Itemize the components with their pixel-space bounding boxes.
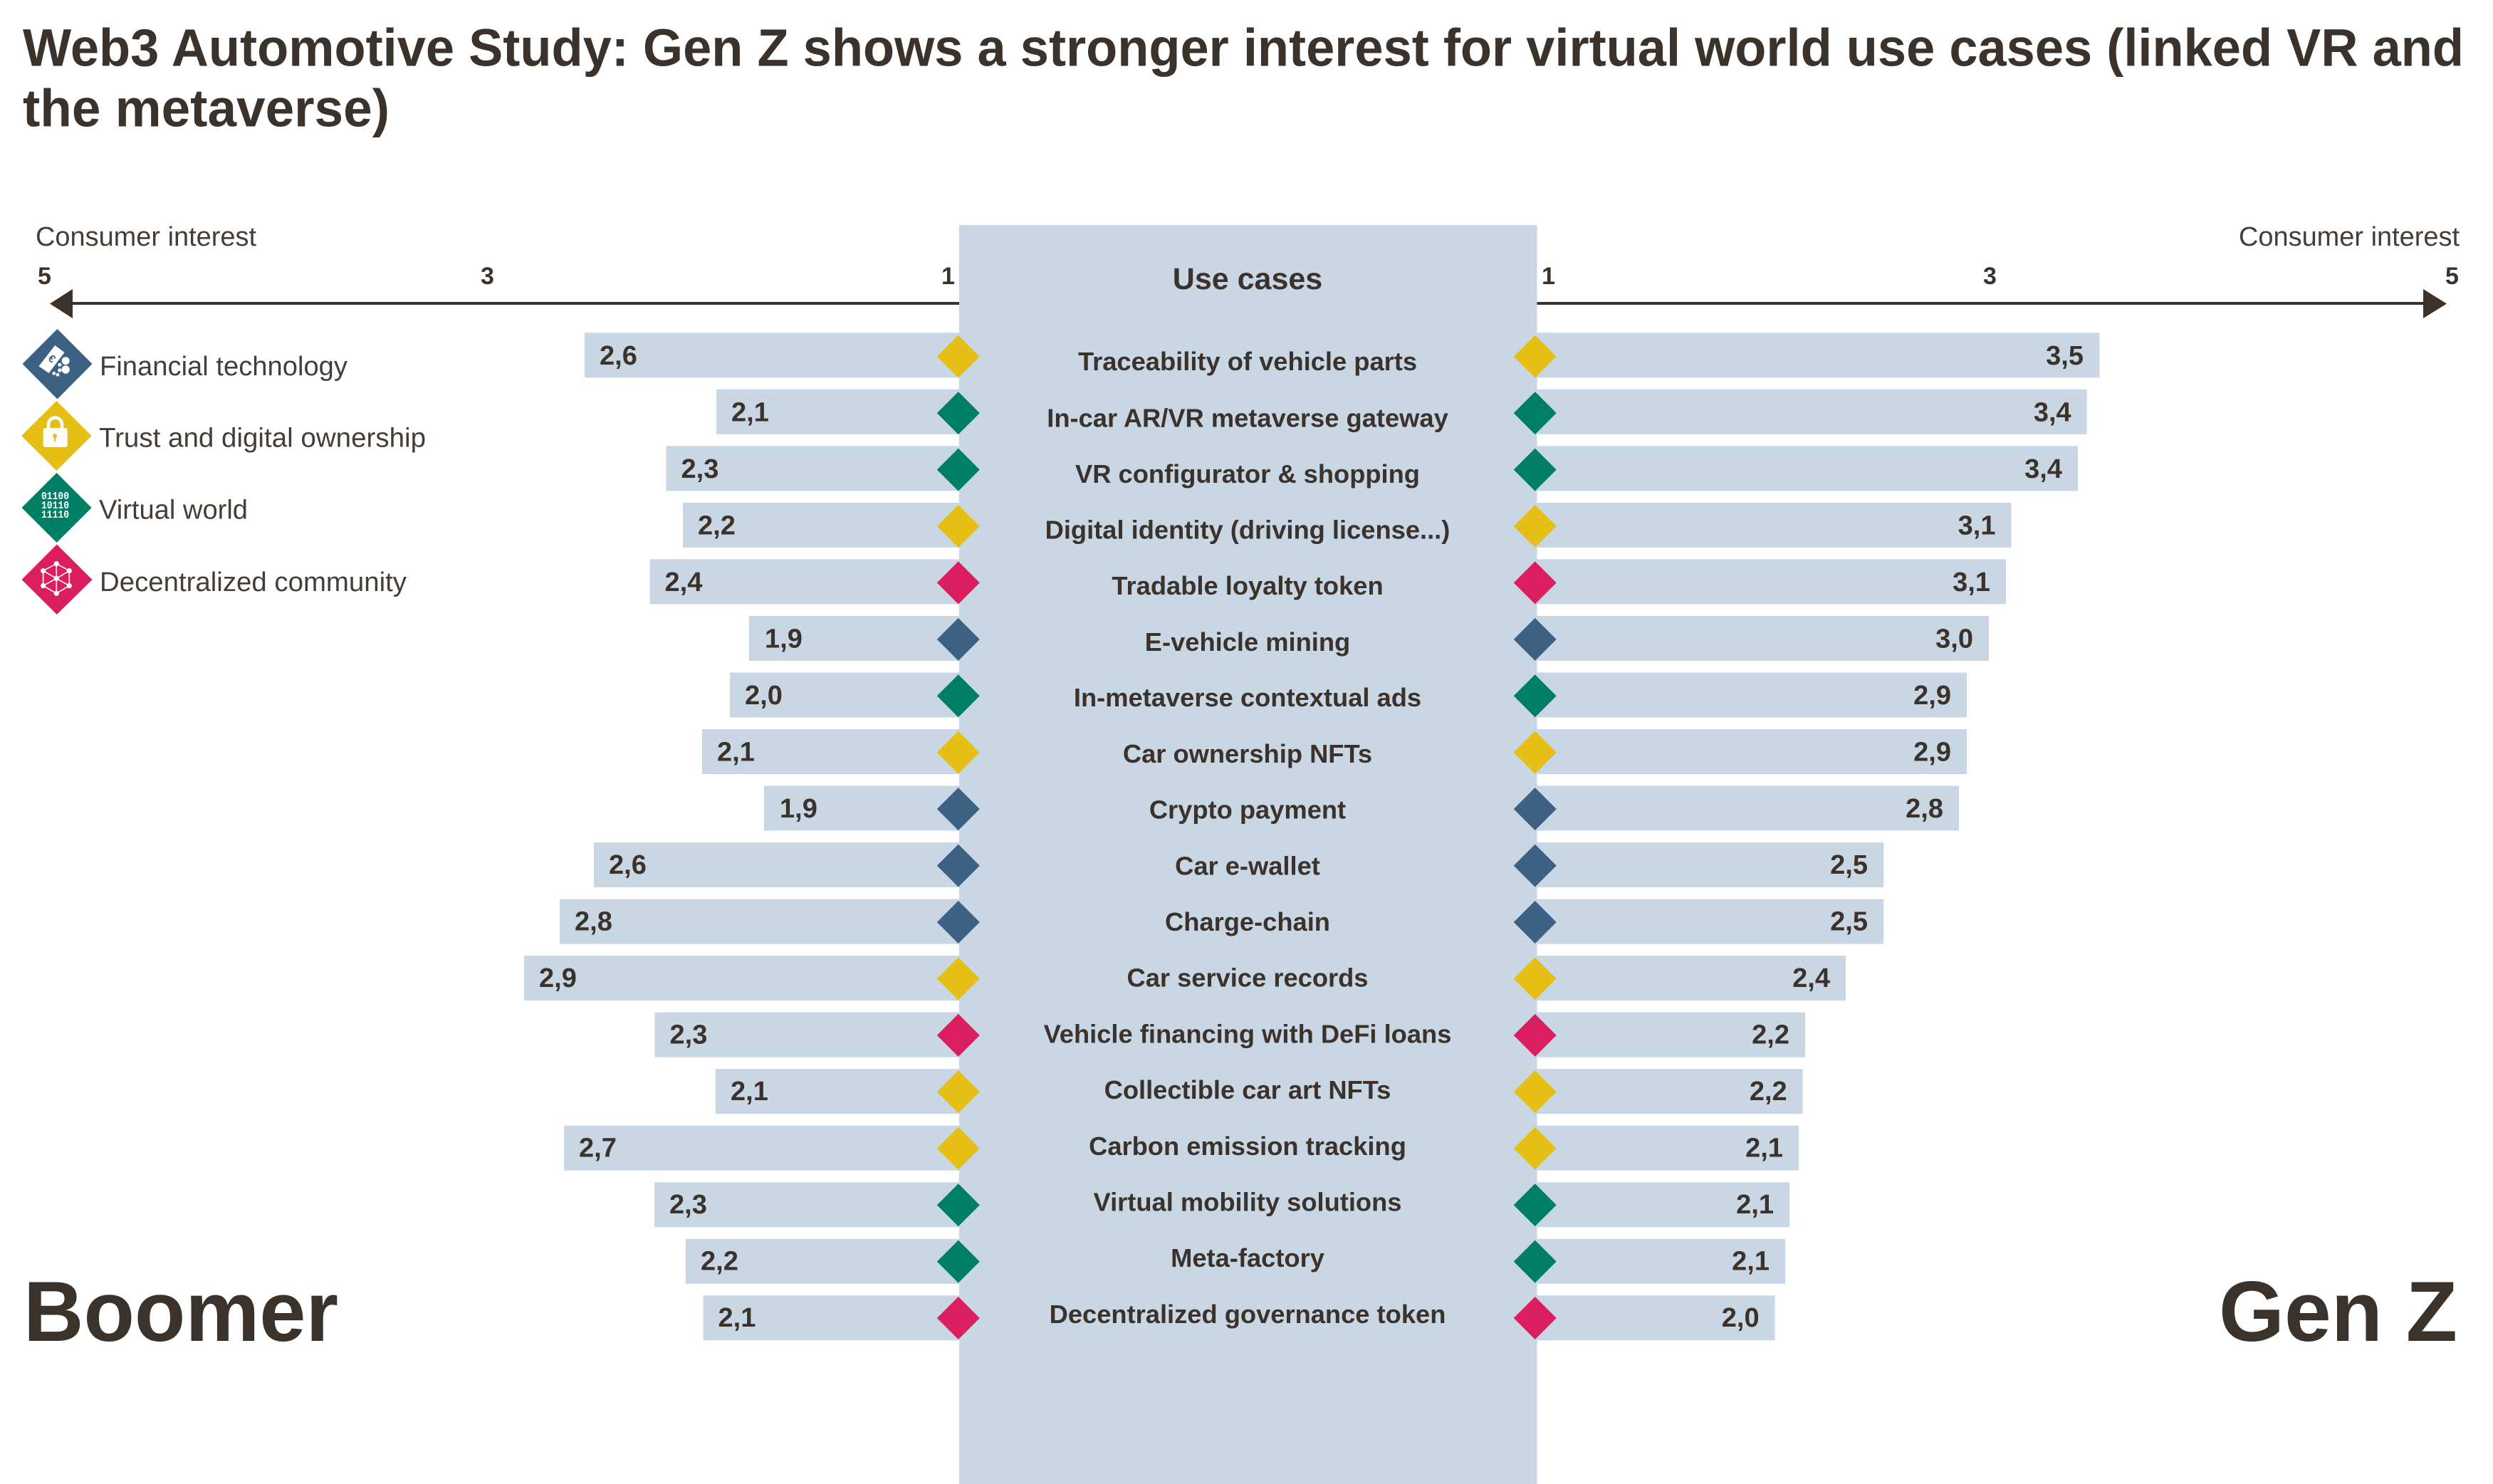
title: Web3 Automotive Study: Gen Z shows a stronger interest for virtual world use cases (linked VR and <box>23 19 2464 77</box>
row: Collectible car art NFTs <box>716 1069 1803 1114</box>
row: Collectible car art NFTs: 2,1 <box>731 1077 768 1107</box>
row: VR configurator & shopping: VR configurator & shopping <box>1075 459 1420 488</box>
row: In-car AR/VR metaverse gateway: In-car AR/VR metaverse gateway <box>1047 403 1448 433</box>
legend item: virtual world: 11110 <box>41 510 69 521</box>
row: Car service records <box>524 956 1846 1000</box>
row: Carbon emission tracking <box>564 1126 1799 1171</box>
row: Car ownership NFTs: 2,1 <box>717 737 755 767</box>
row: Vehicle financing with DeFi loans: Vehicle financing with DeFi loans <box>1044 1019 1451 1048</box>
row: In-car AR/VR metaverse gateway <box>716 390 2087 434</box>
axis: Gen Z consumer interest: 5 <box>2445 263 2459 290</box>
axis: Gen Z consumer interest: Consumer interest <box>2239 222 2460 252</box>
axis: Boomer consumer interest: 5 <box>38 263 51 290</box>
row: Charge-chain: 2,8 <box>575 907 612 937</box>
panel: use cases column <box>959 225 1537 1484</box>
row: Meta-factory: 2,1 <box>1732 1246 1770 1276</box>
row: Virtual mobility solutions: 2,3 <box>669 1190 707 1220</box>
row: Collectible car art NFTs: Collectible car art NFTs <box>1104 1075 1391 1104</box>
row: Virtual mobility solutions: 2,1 <box>1736 1190 1774 1220</box>
legend item: financial technology: € <box>46 352 58 366</box>
axis: Boomer consumer interest: Consumer interest <box>36 222 256 252</box>
row: Charge-chain <box>560 899 1883 944</box>
row: E-vehicle mining: 3,0 <box>1935 624 1973 654</box>
row: Meta-factory: Meta-factory <box>1171 1243 1324 1273</box>
row: Virtual mobility solutions <box>654 1182 1789 1227</box>
row: Crypto payment: 1,9 <box>780 794 817 824</box>
row: Car ownership NFTs: Car ownership NFTs <box>1123 739 1372 768</box>
row: Digital identity (driving license...) <box>683 503 2011 548</box>
axis: Boomer consumer interest: 1 <box>941 263 955 290</box>
row: VR configurator & shopping <box>667 446 2078 491</box>
row: Carbon emission tracking: 2,1 <box>1745 1134 1783 1164</box>
label: Boomer: Boomer <box>23 1264 338 1359</box>
legend <box>21 329 426 615</box>
row: Car service records: 2,9 <box>539 963 577 993</box>
row: Car ownership NFTs: 2,9 <box>1913 737 1951 767</box>
legend item: virtual world: Virtual world <box>99 496 248 526</box>
row: Digital identity (driving license...): Digital identity (driving license...) <box>1045 516 1450 544</box>
row: VR configurator & shopping: 2,3 <box>681 454 718 484</box>
row: Car e-wallet: 2,5 <box>1830 850 1868 880</box>
row: Crypto payment <box>764 786 1959 830</box>
row: In-metaverse contextual ads: 2,0 <box>745 681 783 711</box>
row: In-metaverse contextual ads: 2,9 <box>1913 681 1951 711</box>
row: E-vehicle mining: E-vehicle mining <box>1145 627 1350 657</box>
row: E-vehicle mining <box>749 616 1989 661</box>
row: Tradable loyalty token: Tradable loyalty token <box>1112 571 1384 600</box>
row: Collectible car art NFTs: 2,2 <box>1750 1077 1787 1107</box>
row: Meta-factory <box>686 1239 1785 1284</box>
row: Digital identity (driving license...): 2,2 <box>698 511 736 540</box>
row: Decentralized governance token: Decentralized governance token <box>1050 1300 1446 1329</box>
row: Charge-chain: Charge-chain <box>1165 907 1330 936</box>
row: E-vehicle mining: 1,9 <box>765 624 803 654</box>
row: Tradable loyalty token: 3,1 <box>1953 568 1990 597</box>
title: the metaverse) <box>23 78 390 138</box>
legend item: trust and digital ownership <box>21 401 426 471</box>
legend item: virtual world <box>21 473 248 543</box>
title <box>23 19 2464 138</box>
row: Meta-factory: 2,2 <box>701 1246 738 1276</box>
axis: Boomer consumer interest <box>36 222 961 318</box>
row: Decentralized governance token <box>704 1295 1775 1340</box>
row: Tradable loyalty token <box>649 559 2006 604</box>
row: Traceability of vehicle parts: 3,5 <box>2046 341 2084 371</box>
legend item: decentralized community: Decentralized community <box>100 568 407 597</box>
row: In-car AR/VR metaverse gateway: 2,1 <box>731 397 769 427</box>
row: Car service records: Car service records <box>1127 963 1369 993</box>
label: Gen Z: Gen Z <box>2219 1264 2457 1359</box>
row: Vehicle financing with DeFi loans <box>655 1013 1805 1057</box>
axis: Gen Z consumer interest <box>1535 222 2460 318</box>
legend item: virtual world: 10110 <box>41 501 69 512</box>
row: Virtual mobility solutions: Virtual mobility solutions <box>1094 1188 1401 1216</box>
row: VR configurator & shopping: 3,4 <box>2024 454 2062 484</box>
row: Car e-wallet: 2,6 <box>609 850 647 880</box>
row: Vehicle financing with DeFi loans: 2,2 <box>1752 1020 1789 1050</box>
row: Crypto payment: Crypto payment <box>1149 795 1346 825</box>
row: Tradable loyalty token: 2,4 <box>665 568 702 597</box>
row: Car service records: 2,4 <box>1792 963 1830 993</box>
legend item: financial technology <box>23 329 347 399</box>
legend item: trust and digital ownership: Trust and digital ownership <box>99 423 426 453</box>
row: In-metaverse contextual ads <box>730 672 1967 718</box>
row: Car ownership NFTs <box>702 729 1967 774</box>
row: Car e-wallet <box>594 842 1883 887</box>
axis: Boomer consumer interest: 3 <box>481 263 494 290</box>
row: In-metaverse contextual ads: In-metaverse contextual ads <box>1074 683 1421 712</box>
row: Vehicle financing with DeFi loans: 2,3 <box>669 1020 707 1050</box>
axis: Gen Z consumer interest: 3 <box>1983 263 1997 290</box>
row: Traceability of vehicle parts: 2,6 <box>600 341 637 371</box>
row: Decentralized governance token: 2,0 <box>1722 1303 1760 1333</box>
row: Traceability of vehicle parts <box>585 333 2099 378</box>
row: In-car AR/VR metaverse gateway: 3,4 <box>2034 397 2071 427</box>
row: Decentralized governance token: 2,1 <box>718 1303 756 1333</box>
row: Car e-wallet: Car e-wallet <box>1175 851 1320 880</box>
heading: use cases: Use cases <box>1173 262 1322 296</box>
row: Crypto payment: 2,8 <box>1906 794 1943 824</box>
row: Carbon emission tracking: Carbon emission tracking <box>1089 1132 1406 1161</box>
legend item: virtual world: 01100 <box>41 491 69 503</box>
row: Carbon emission tracking: 2,7 <box>579 1134 617 1164</box>
row: Digital identity (driving license...): 3,1 <box>1958 511 1995 540</box>
row: Charge-chain: 2,5 <box>1830 907 1868 937</box>
axis: Gen Z consumer interest: 1 <box>1542 263 1555 290</box>
row: Traceability of vehicle parts: Traceability of vehicle parts <box>1078 347 1417 376</box>
legend item: decentralized community <box>21 544 407 615</box>
legend item: financial technology: Financial technology <box>100 352 347 382</box>
